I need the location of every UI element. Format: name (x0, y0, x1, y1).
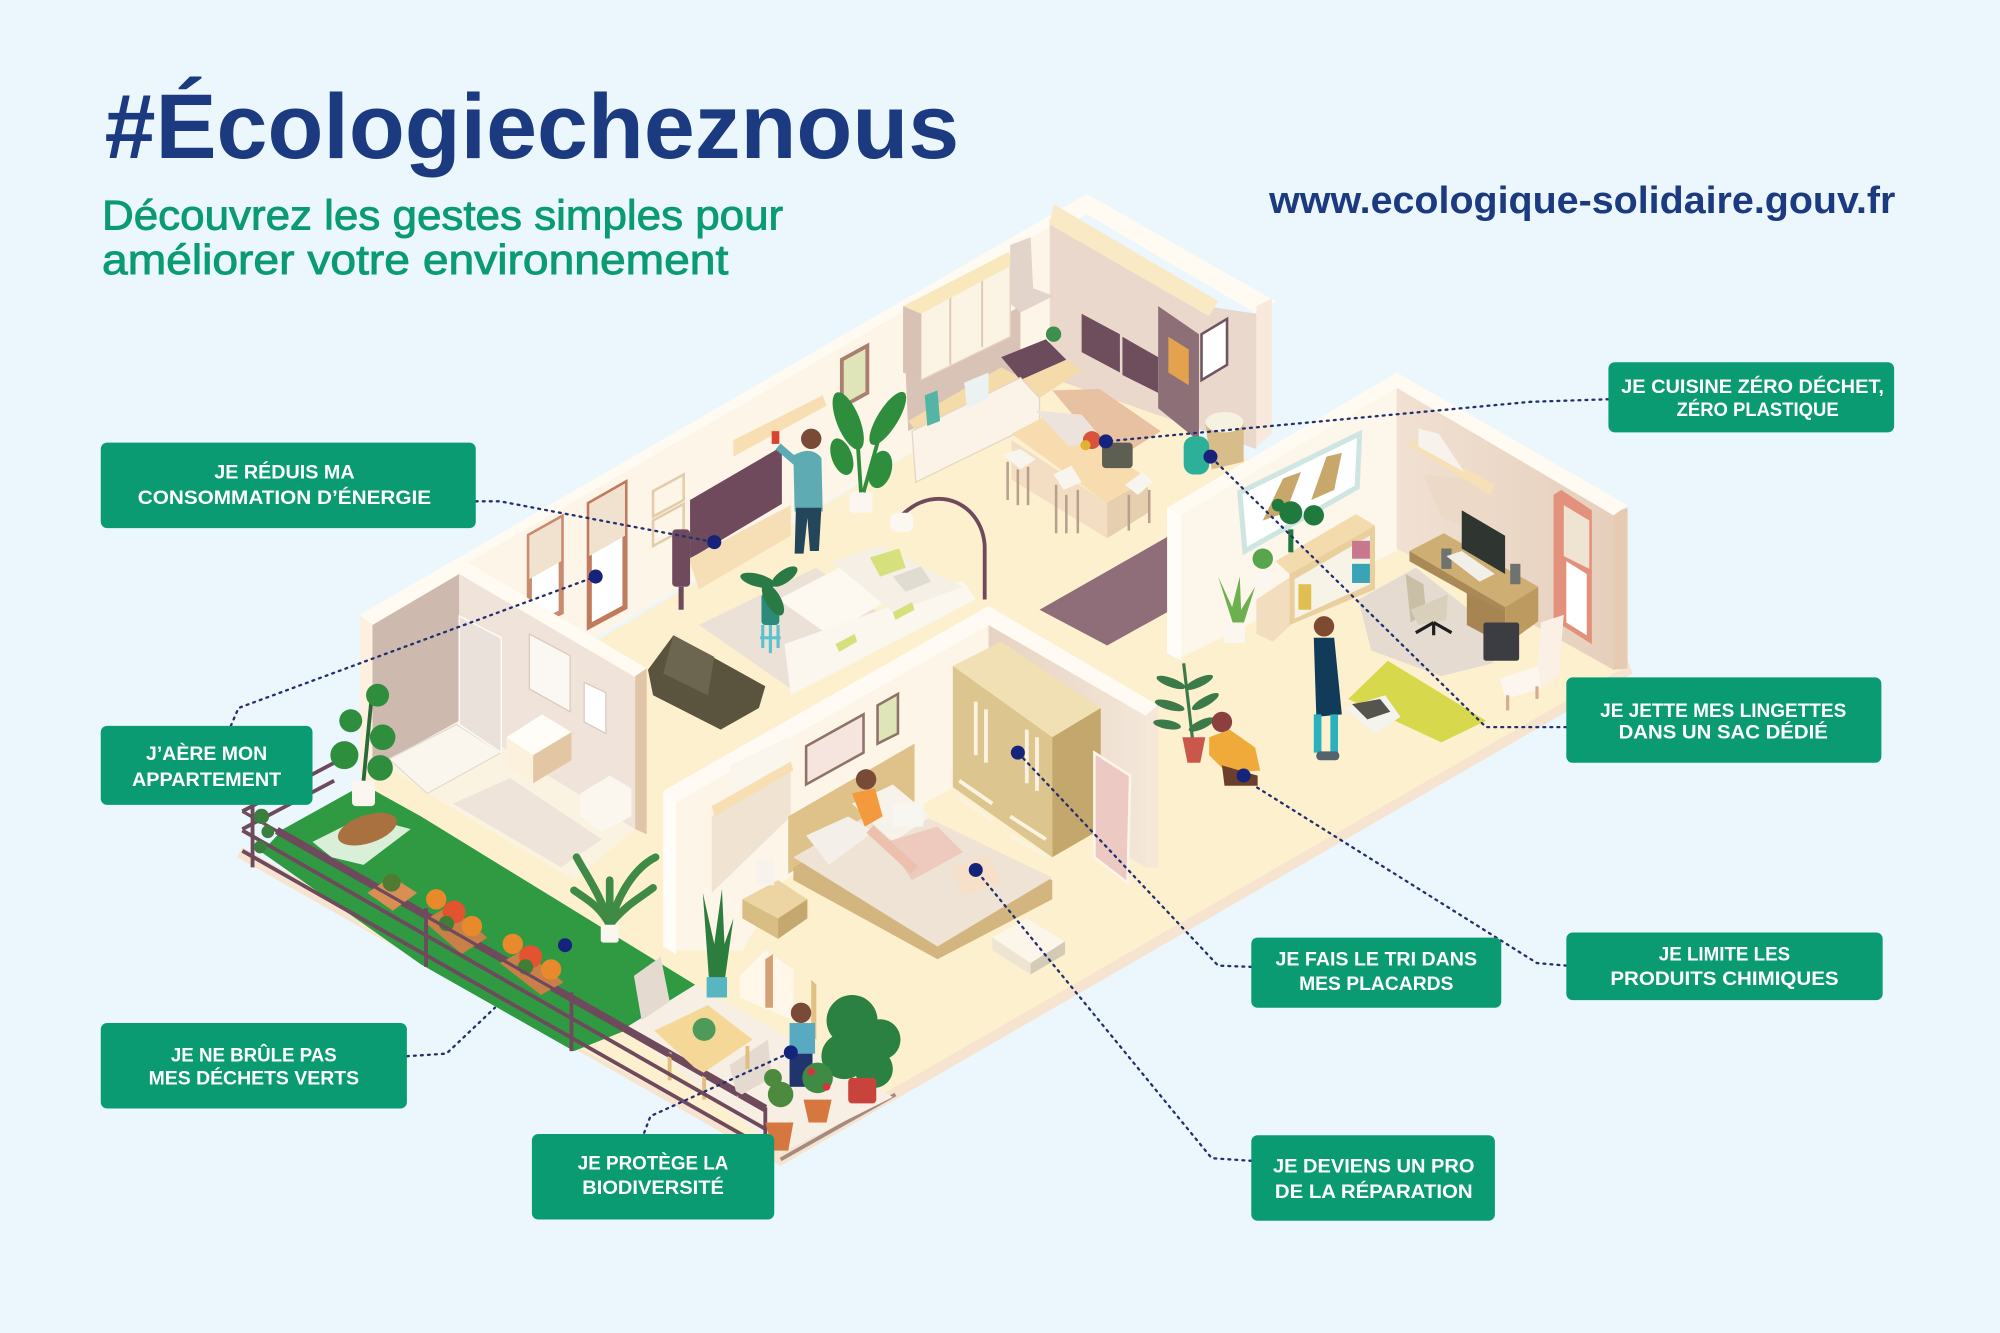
plant: office floor plants (1218, 499, 1324, 643)
marker dots (558, 434, 1251, 1059)
plant: table pot (739, 563, 801, 625)
callout: aérer: APPARTEMENT (132, 769, 281, 791)
illustration: isometric apartment (237, 194, 1633, 1166)
dog on blanket (312, 806, 411, 865)
callout: énergie (101, 443, 476, 528)
climbing plant on rail (254, 809, 274, 853)
panel: garden terrace (242, 763, 893, 1156)
callout: produits chimiques (1566, 932, 1883, 1000)
callout: déchets verts: JE NE BRÛLE PAS (171, 1042, 337, 1066)
woman standing (1314, 616, 1342, 760)
plant: monstera (821, 995, 901, 1103)
plant: tomato pots (764, 1063, 833, 1151)
callout: placards: JE FAIS LE TRI DANS (1276, 949, 1477, 971)
panel: back wall and living room wall (360, 194, 1276, 714)
panel: bathroom (360, 557, 647, 880)
callout: lingettes: JE JETTE MES LINGETTES (1600, 700, 1846, 722)
callout: lingettes: DANS UN SAC DÉDIÉ (1619, 721, 1828, 744)
callout: cuisine (1608, 362, 1894, 432)
callout: énergie: JE RÉDUIS MA (214, 460, 355, 483)
callout: cuisine: JE CUISINE ZÉRO DÉCHET, (1621, 375, 1884, 398)
panel: kitchen (903, 204, 1272, 538)
woman kneeling with plant (1209, 712, 1260, 786)
callout: produits chimiques: JE LIMITE LES (1659, 944, 1790, 966)
callout: énergie: CONSOMMATION D’ÉNERGIE (138, 486, 431, 509)
person on the bed (852, 769, 923, 870)
person at the TV shelf (772, 429, 823, 554)
callout: lingettes (1566, 677, 1881, 763)
panel: living room (648, 395, 1167, 730)
callout: cuisine: ZÉRO PLASTIQUE (1677, 398, 1839, 421)
plant: office fiddle (1152, 663, 1221, 763)
plant: snake plant (703, 889, 733, 998)
subtitle: Découvrez les gestes simples pour (102, 192, 783, 239)
floor slab (237, 370, 1633, 1166)
callout: aérer (101, 726, 312, 805)
callout: biodiversité (532, 1134, 774, 1219)
website url: www.ecologique-solidaire.gouv.fr (1268, 179, 1896, 222)
callout: déchets verts (101, 1023, 407, 1108)
plants (330, 387, 1324, 1151)
plant: bathroom side (330, 684, 395, 806)
dotted leader lines (231, 399, 1608, 1161)
panel: bedroom (663, 606, 1158, 1040)
subtitle: améliorer votre environnement (102, 236, 729, 283)
plant: palm near bedroom (574, 857, 656, 943)
railing (242, 763, 768, 1156)
callout: réparation: JE DEVIENS UN PRO (1273, 1155, 1474, 1177)
railing beam (277, 830, 765, 1108)
callout: placards: MES PLACARDS (1299, 973, 1453, 995)
callout: aérer: J’AÈRE MON (146, 742, 267, 765)
callout: placards (1251, 938, 1501, 1008)
callout: déchets verts: MES DÉCHETS VERTS (149, 1066, 359, 1089)
callout: réparation: DE LA RÉPARATION (1275, 1180, 1473, 1203)
callout: biodiversité: BIODIVERSITÉ (582, 1176, 724, 1199)
panel: office (1167, 372, 1628, 742)
callout: réparation (1251, 1135, 1495, 1221)
planter boxes (367, 874, 564, 995)
title: #Écologiecheznous (105, 75, 959, 178)
seated person (790, 1003, 815, 1087)
terrace table and chairs (634, 957, 772, 1100)
purple rug (1040, 537, 1167, 645)
plant: living room tall (826, 387, 913, 513)
callout: produits chimiques: PRODUITS CHIMIQUES (1610, 968, 1839, 990)
subtitle (102, 192, 783, 283)
callout: biodiversité: JE PROTÈGE LA (578, 1152, 728, 1175)
